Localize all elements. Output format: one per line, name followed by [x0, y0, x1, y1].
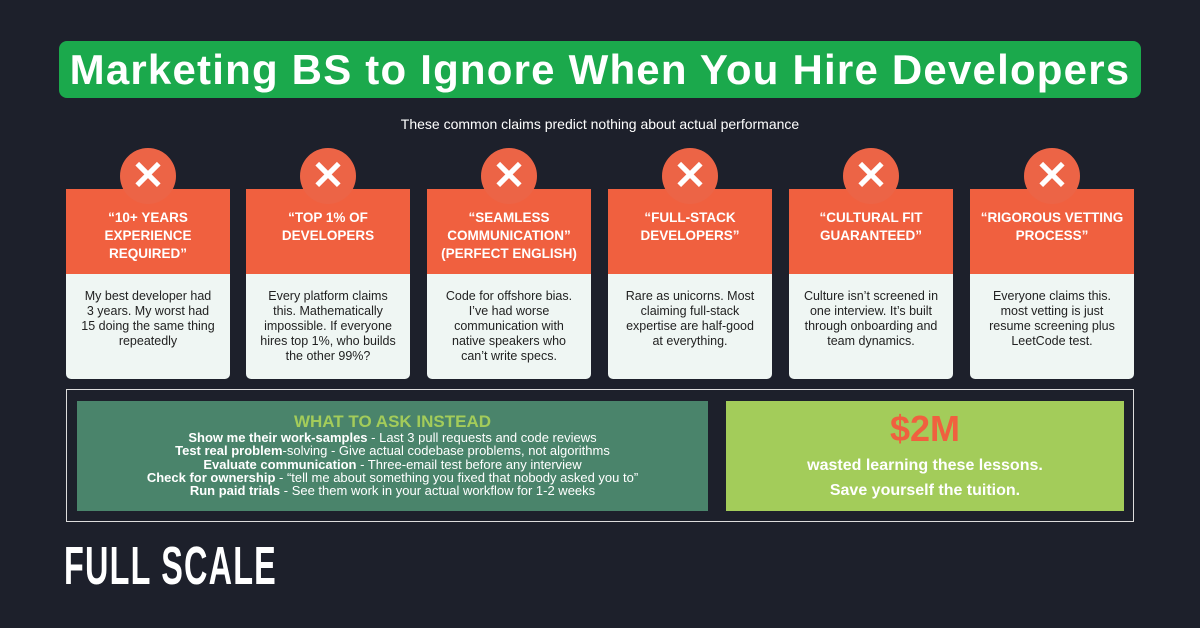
title: Marketing BS to Ignore When You Hire Developers — [70, 46, 1130, 93]
card 2: “TOP 1% OF — [288, 210, 368, 225]
card 4: “FULL-STACK — [644, 210, 736, 225]
card 4: ✕ — [673, 154, 707, 198]
card 1: “10+ YEARS — [108, 210, 188, 225]
card 3: (PERFECT ENGLISH) — [441, 246, 577, 261]
card 4 — [608, 148, 772, 379]
card 6: “RIGOROUS VETTING — [981, 210, 1123, 225]
card 2 — [246, 148, 410, 379]
panel: what to ask instead: WHAT TO ASK INSTEAD — [294, 412, 491, 431]
panel: what to ask instead: Test real problem-solving - Give actual codebase problems, not algorithms — [175, 443, 610, 458]
card 1 — [66, 148, 230, 379]
panel: what to ask instead — [77, 401, 708, 511]
logo: FULL SCALE — [64, 536, 277, 596]
subtitle: These common claims predict nothing about actual performance — [401, 116, 799, 132]
card 3: ✕ — [492, 154, 526, 198]
panel: cost callout: $2M — [890, 408, 960, 449]
card 3: “SEAMLESS — [468, 210, 550, 225]
card 1: REQUIRED” — [109, 246, 187, 261]
card 3: COMMUNICATION” — [447, 228, 571, 243]
bottom frame — [66, 389, 1134, 522]
card 3: Code for offshore bias. I’ve had worse communication with native speakers who can’t write specs. — [446, 289, 572, 363]
card 5: GUARANTEED” — [820, 228, 922, 243]
card 2: ✕ — [311, 154, 345, 198]
card 4: Rare as unicorns. Most claiming full-stack expertise are half-good at everything. — [626, 289, 754, 348]
panel: cost callout: Save yourself the tuition. — [830, 482, 1020, 499]
card 2: DEVELOPERS — [282, 228, 374, 243]
panel: what to ask instead: Evaluate communication - Three-email test before any interview — [203, 457, 582, 472]
panel: what to ask instead: Show me their work-samples - Last 3 pull requests and code reviews — [188, 430, 597, 445]
card 1: EXPERIENCE — [104, 228, 192, 243]
card 6: Everyone claims this. most vetting is just resume screening plus LeetCode test. — [989, 289, 1115, 348]
panel: cost callout: wasted learning these lessons. — [807, 457, 1043, 474]
card 6: ✕ — [1035, 154, 1069, 198]
card 6 — [970, 148, 1134, 379]
card 5: Culture isn’t screened in one interview. It’s built through onboarding and team dynamics. — [804, 289, 938, 348]
panel: cost callout — [726, 401, 1124, 511]
panel: what to ask instead: Check for ownership - “tell me about something you fixed that nobody asked you to” — [147, 470, 638, 485]
card 2: Every platform claims this. Mathematically impossible. If everyone hires top 1%, who builds the other 99%? — [260, 289, 396, 363]
card 4: DEVELOPERS” — [640, 228, 740, 243]
card 5: ✕ — [854, 154, 888, 198]
card 1: My best developer had 3 years. My worst had 15 doing the same thing repeatedly — [81, 289, 215, 348]
card 1: ✕ — [131, 154, 165, 198]
panel: what to ask instead: Run paid trials - See them work in your actual workflow for 1-2 weeks — [190, 483, 595, 498]
card 6: PROCESS” — [1016, 228, 1088, 243]
card 3 — [427, 148, 591, 379]
card 5: “CULTURAL FIT — [820, 210, 922, 225]
card 5 — [789, 148, 953, 379]
